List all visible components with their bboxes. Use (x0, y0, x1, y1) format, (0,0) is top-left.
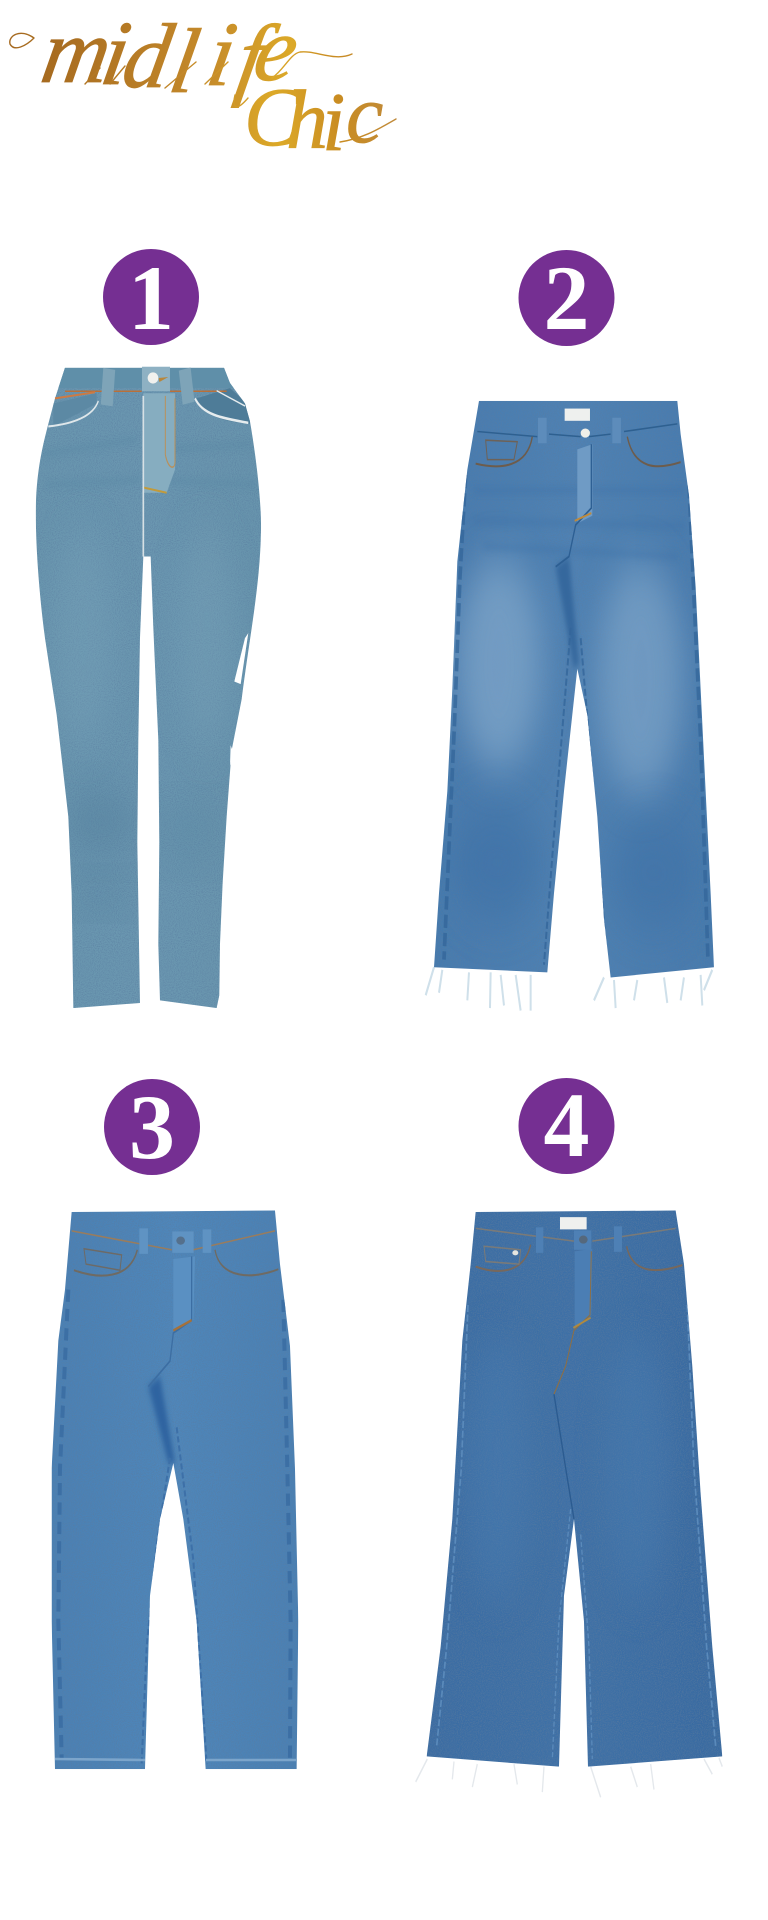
number badge 2 (518, 247, 614, 349)
jeans 3 illustration (47, 1205, 303, 1774)
panel: jeans 2 (426, 247, 717, 1011)
number badge 3: 3 (129, 1076, 175, 1178)
panel: jeans 4 (416, 1074, 724, 1797)
logo flourishes (10, 33, 396, 142)
number badge 4: 4 (544, 1074, 590, 1176)
fringe (426, 967, 712, 1011)
fringe (416, 1758, 722, 1797)
number badge 1: 1 (128, 247, 174, 349)
jeans 1 illustration (30, 358, 270, 1021)
panel: jeans 3 (47, 1076, 303, 1774)
jeans 2 illustration (426, 393, 717, 1011)
number badge 2: 2 (544, 247, 590, 349)
number badge 1 (103, 247, 199, 349)
jeans 4 illustration (416, 1205, 724, 1797)
number badge 3 (104, 1076, 200, 1178)
panel: jeans 1 (30, 247, 270, 1021)
number badge 4 (518, 1074, 614, 1176)
logo: Midlife Chic (10, 0, 396, 169)
details (444, 424, 708, 965)
logo word: Chic: Chic (244, 68, 383, 169)
logo word: Midlife: midlife (33, 0, 306, 113)
